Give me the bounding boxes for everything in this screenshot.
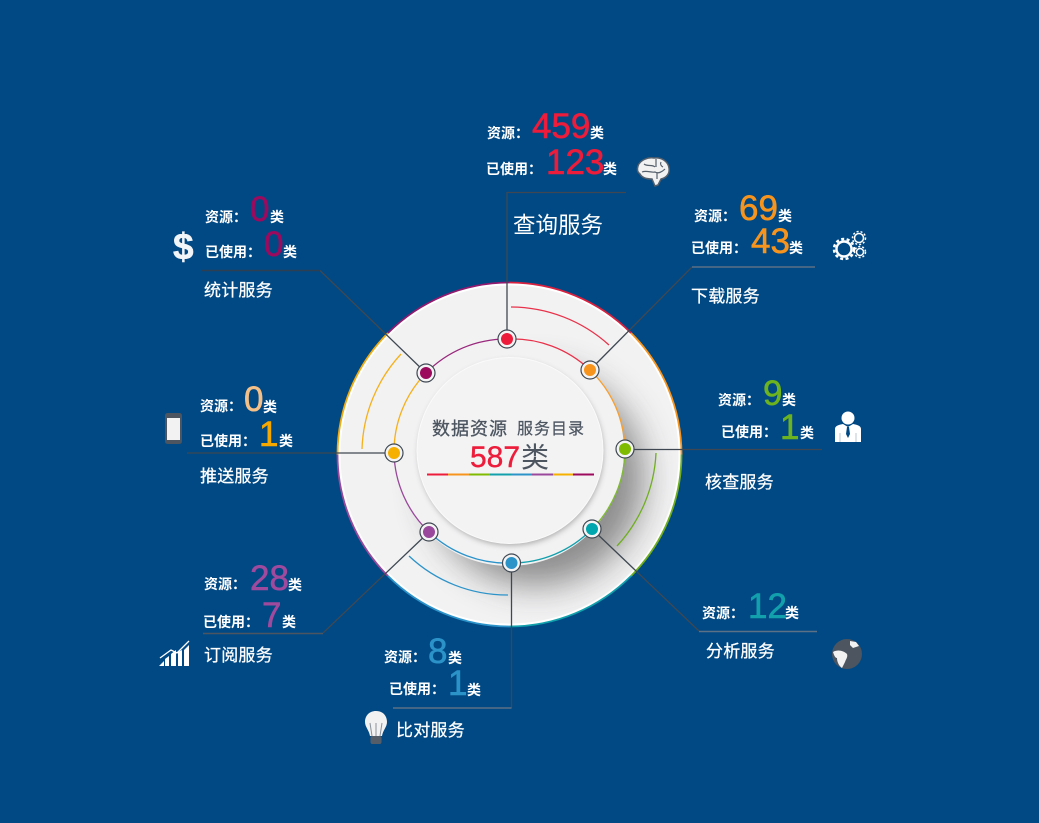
resource count: 资源： xyxy=(204,576,246,592)
used count: 类 xyxy=(603,161,617,177)
resource count: 0 xyxy=(250,190,269,229)
used count: 类 xyxy=(789,240,803,256)
resource count: 资源： xyxy=(200,398,242,414)
heading: 统计服务 xyxy=(204,281,273,300)
icon: growth chart xyxy=(159,641,189,666)
used count: 1 xyxy=(780,408,799,447)
leader line xyxy=(592,529,699,631)
icon: dollar: $ xyxy=(173,226,194,267)
service: 比对服务 xyxy=(365,554,520,744)
service: 推送服务 xyxy=(165,380,403,486)
used count: 已使用： xyxy=(200,433,256,449)
service: 统计服务 xyxy=(173,190,435,382)
resource count: 69 xyxy=(739,189,778,228)
node xyxy=(616,440,634,458)
heading: 推送服务 xyxy=(200,467,269,486)
leader line xyxy=(625,448,822,450)
resource count: 资源： xyxy=(487,125,529,141)
resource count xyxy=(205,190,284,229)
centre colour bar xyxy=(427,474,594,476)
centre title: 服务目录 xyxy=(517,420,585,438)
resource count xyxy=(718,374,796,413)
heading: 比对服务 xyxy=(396,721,465,740)
used count: 已使用： xyxy=(203,614,259,630)
used count: 类 xyxy=(467,682,481,698)
used count xyxy=(721,408,814,447)
node xyxy=(498,330,516,348)
used count: 已使用： xyxy=(691,240,747,256)
used count: 0 xyxy=(264,225,283,264)
heading: 分析服务 xyxy=(706,642,775,661)
used count: 43 xyxy=(751,222,790,261)
resource count: 类 xyxy=(448,650,462,666)
service: 订阅服务 xyxy=(159,523,438,666)
used count: 类 xyxy=(800,425,814,441)
middle disc xyxy=(394,336,624,566)
node xyxy=(583,520,601,538)
icon: person xyxy=(835,412,861,442)
rule xyxy=(699,630,817,632)
resource count: 12 xyxy=(748,587,787,626)
resource count: 28 xyxy=(250,559,289,598)
leader line xyxy=(510,563,512,708)
used count xyxy=(205,225,297,264)
inner disc shadow xyxy=(418,360,604,546)
centre title: 类 xyxy=(521,442,549,473)
used count: 已使用： xyxy=(486,161,542,177)
resource count: 类 xyxy=(270,209,284,225)
quarter accent arcs xyxy=(362,307,656,595)
used count: 类 xyxy=(283,244,297,260)
used count: 已使用： xyxy=(721,424,777,440)
node xyxy=(417,364,435,382)
used count: 类 xyxy=(282,614,296,630)
central ring diagram xyxy=(338,282,682,626)
resource count xyxy=(204,559,302,598)
heading: 查询服务 xyxy=(513,213,603,238)
icon: brain xyxy=(637,158,669,186)
used count: 已使用： xyxy=(205,244,261,260)
resource count: 0 xyxy=(244,380,263,419)
node xyxy=(581,361,599,379)
resource count: 类 xyxy=(590,125,604,141)
leader line xyxy=(320,270,426,373)
inner disc xyxy=(417,358,603,544)
heading: 订阅服务 xyxy=(204,646,273,665)
resource count: 类 xyxy=(785,605,799,621)
icon: gears xyxy=(834,232,866,259)
node xyxy=(385,444,403,462)
service: 下载服务 xyxy=(581,189,866,379)
service: 核查服务 xyxy=(616,374,861,492)
centre title: 587 xyxy=(470,441,520,474)
rule xyxy=(692,266,815,268)
node xyxy=(502,554,520,572)
service: 分析服务 xyxy=(583,520,862,669)
used count xyxy=(691,222,803,261)
rule xyxy=(203,632,323,634)
service: 查询服务 xyxy=(486,107,669,348)
used count: 类 xyxy=(279,433,293,449)
resource count: 类 xyxy=(782,392,796,408)
resource count xyxy=(487,107,604,146)
node xyxy=(420,523,438,541)
used count: 1 xyxy=(448,664,467,703)
resource count: 类 xyxy=(263,399,277,415)
used count: 1 xyxy=(259,415,278,454)
used count: 7 xyxy=(262,596,281,635)
heading: 下载服务 xyxy=(691,287,760,306)
resource count xyxy=(694,189,792,228)
used count xyxy=(486,143,617,182)
rule xyxy=(201,270,320,272)
used count xyxy=(200,415,293,454)
centre title: 数据资源 xyxy=(432,419,508,439)
resource count: 资源： xyxy=(384,649,426,665)
icon: globe xyxy=(832,639,862,669)
used count xyxy=(203,596,296,635)
leader line xyxy=(323,532,429,633)
resource count: 9 xyxy=(763,374,782,413)
resource count xyxy=(702,587,799,626)
rule xyxy=(393,707,512,709)
coloured outer rim xyxy=(338,282,682,626)
resource count: 资源： xyxy=(205,209,247,225)
leader line xyxy=(507,192,626,339)
resource count: 资源： xyxy=(702,605,744,621)
heading: 核查服务 xyxy=(705,473,774,492)
resource count: 459 xyxy=(532,107,590,146)
icon: phone xyxy=(165,413,182,444)
resource count: 8 xyxy=(428,632,447,671)
used count: 123 xyxy=(546,143,604,182)
resource count xyxy=(384,632,462,671)
resource count: 类 xyxy=(288,577,302,593)
resource count xyxy=(200,380,277,419)
middle ring arcs xyxy=(394,339,625,563)
leader line xyxy=(590,267,692,370)
resource count: 资源： xyxy=(694,208,736,224)
centre title xyxy=(432,419,585,474)
used count: 已使用： xyxy=(389,681,445,697)
resource count: 资源： xyxy=(718,392,760,408)
used count xyxy=(389,664,481,703)
resource count: 类 xyxy=(778,208,792,224)
outer disc xyxy=(339,284,680,625)
leader line xyxy=(187,452,394,454)
icon: light bulb xyxy=(365,711,387,744)
disc drop shadow xyxy=(428,370,644,586)
